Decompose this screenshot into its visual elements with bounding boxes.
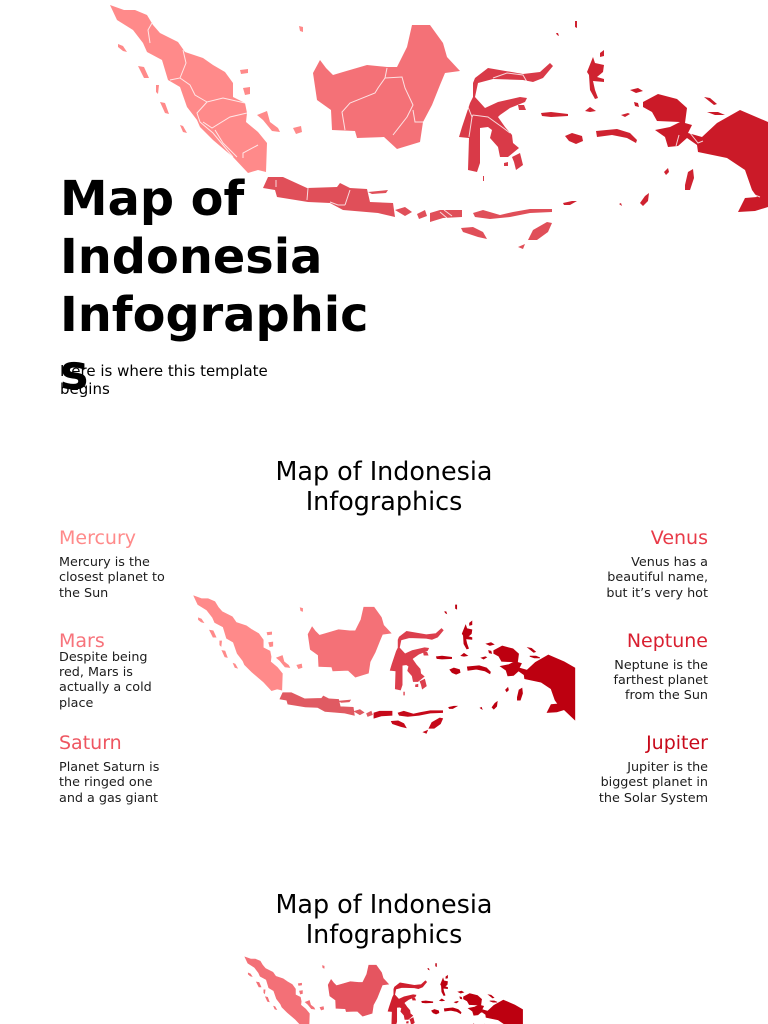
text: Jupiter: the Solar System: [599, 791, 708, 806]
text: Mars: actually a cold: [59, 680, 152, 695]
main title: s: [60, 346, 88, 401]
text: Saturn: and a gas giant: [59, 791, 158, 806]
text: Saturn: Planet Saturn is: [59, 760, 159, 775]
section heading 1: Map of Indonesia: [276, 456, 492, 486]
text: Saturn: [59, 760, 159, 806]
label: Jupiter: Jupiter: [646, 732, 708, 754]
subtitle: [60, 362, 268, 398]
text: Jupiter: Jupiter is the: [627, 760, 708, 775]
text: Neptune: from the Sun: [625, 688, 708, 703]
text: Jupiter: [599, 760, 708, 806]
text: Mars: [59, 650, 152, 711]
subtitle: Here is where this template: [60, 362, 268, 380]
text: Mars: red, Mars is: [59, 665, 133, 680]
text: Saturn: the ringed one: [59, 775, 153, 790]
label: Venus: Venus: [651, 526, 708, 548]
section heading 1: Infographics: [306, 486, 462, 516]
text: Venus: [606, 555, 708, 601]
text: Mercury: the Sun: [59, 586, 108, 601]
region: Papua: [630, 88, 768, 225]
text: Neptune: [613, 658, 708, 703]
section heading 2: Infographics: [306, 918, 462, 948]
label: Neptune: Neptune: [627, 630, 708, 652]
subtitle: begins: [60, 380, 110, 398]
text: Jupiter: biggest planet in: [601, 775, 708, 790]
section heading 1: [276, 456, 492, 516]
text: Neptune: Neptune is the: [614, 658, 708, 672]
text: Venus: but it’s very hot: [606, 586, 708, 601]
main title: Indonesia: [60, 230, 322, 285]
text: Mars: place: [59, 696, 93, 711]
text: Mercury: closest planet to: [59, 570, 165, 585]
region: Nusa Tenggara: [430, 209, 552, 249]
region: Maluku: [541, 21, 694, 206]
map: large Indonesia map at top: [110, 5, 768, 249]
region: Sulawesi: [459, 63, 553, 181]
text: Venus: Venus has a: [631, 555, 708, 570]
text: Mercury: [59, 555, 165, 601]
main title: Infographic: [60, 288, 368, 343]
main title: [60, 172, 368, 401]
text: Venus: beautiful name,: [607, 570, 708, 585]
label: Mercury: Mercury: [59, 526, 136, 548]
text: Mars: Despite being: [59, 650, 148, 664]
section heading 2: [276, 888, 492, 948]
region: Kalimantan: [313, 25, 460, 149]
text: Neptune: farthest planet: [613, 673, 708, 688]
label: Mars: Mars: [59, 630, 105, 652]
section heading 2: Map of Indonesia: [276, 888, 492, 918]
region: Java and Bali: [263, 177, 427, 219]
text: Mercury: Mercury is the: [59, 555, 150, 570]
label: Saturn: Saturn: [59, 732, 122, 754]
main title: Map of: [60, 172, 244, 227]
region: Sumatra: [110, 5, 303, 173]
